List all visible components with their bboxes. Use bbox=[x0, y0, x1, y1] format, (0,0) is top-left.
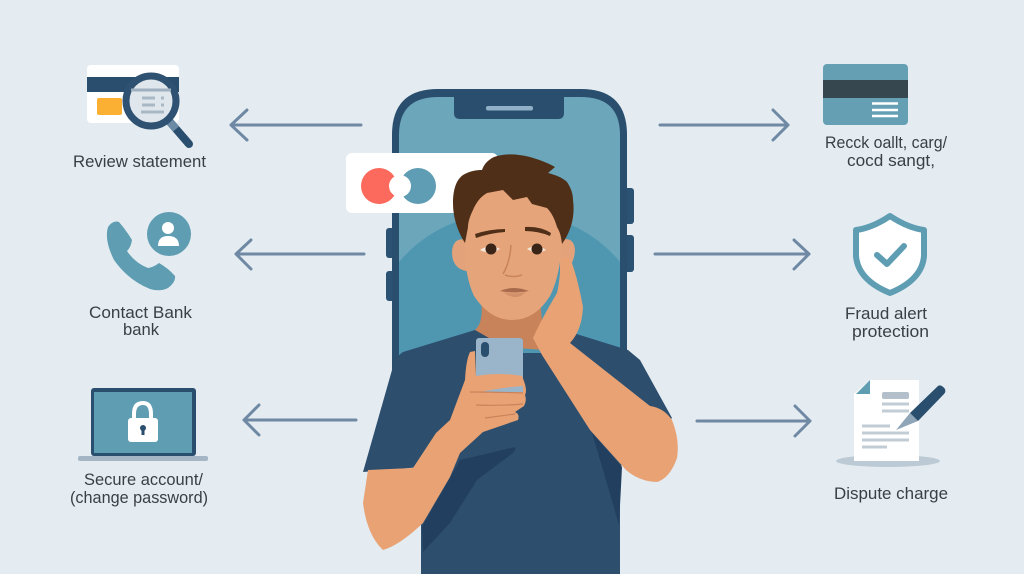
label: contact bank: bank bbox=[123, 321, 160, 339]
phone in hand bbox=[476, 338, 523, 392]
label: card: Recck oallt, carg/ bbox=[825, 134, 947, 152]
icon: document and pen bbox=[836, 380, 945, 467]
label: secure account: Secure account/ bbox=[84, 471, 203, 489]
phone edge under finger bbox=[480, 386, 523, 392]
label: fraud alert: protection bbox=[852, 323, 929, 341]
phone illustration bbox=[386, 89, 634, 400]
icon: card with magnifier bbox=[87, 65, 189, 144]
label: review statement: Review statement bbox=[73, 153, 206, 171]
arrow: contact bank bbox=[236, 240, 364, 269]
eyes bbox=[480, 246, 546, 252]
label: card bbox=[825, 134, 947, 170]
arrow: review statement bbox=[231, 110, 361, 140]
icon: credit card bbox=[823, 64, 908, 125]
hair bbox=[453, 154, 574, 244]
icon: phone and contact bbox=[107, 212, 191, 290]
label: card: cocd sangt, bbox=[847, 152, 935, 170]
label: fraud alert bbox=[845, 305, 929, 341]
person bbox=[363, 154, 678, 574]
arm and hand at cheek bbox=[533, 258, 678, 482]
label: dispute charge: Dispute charge bbox=[834, 485, 948, 503]
arrow: dispute bbox=[697, 406, 810, 436]
ears bbox=[452, 239, 575, 273]
shirt bbox=[363, 330, 672, 574]
icon: laptop with lock bbox=[78, 388, 208, 461]
label: secure account: (change password) bbox=[70, 489, 208, 507]
arrow: fraud alert bbox=[655, 240, 809, 269]
arrow: secure account bbox=[244, 405, 356, 435]
icon: shield bbox=[856, 216, 924, 293]
notification card bbox=[346, 153, 498, 213]
eyebrows bbox=[475, 227, 551, 238]
neck bbox=[475, 300, 545, 350]
label: contact bank bbox=[89, 304, 193, 339]
arm and hand holding phone bbox=[363, 351, 526, 550]
face bbox=[464, 186, 562, 320]
arrow: card bbox=[660, 110, 788, 140]
label: fraud alert: Fraud alert bbox=[845, 305, 927, 323]
finger lines bbox=[470, 392, 523, 418]
label: contact bank: Contact Bank bbox=[89, 304, 193, 322]
label: secure account bbox=[70, 471, 208, 507]
nose and mouth bbox=[503, 245, 522, 276]
shirt shadows bbox=[422, 433, 622, 552]
